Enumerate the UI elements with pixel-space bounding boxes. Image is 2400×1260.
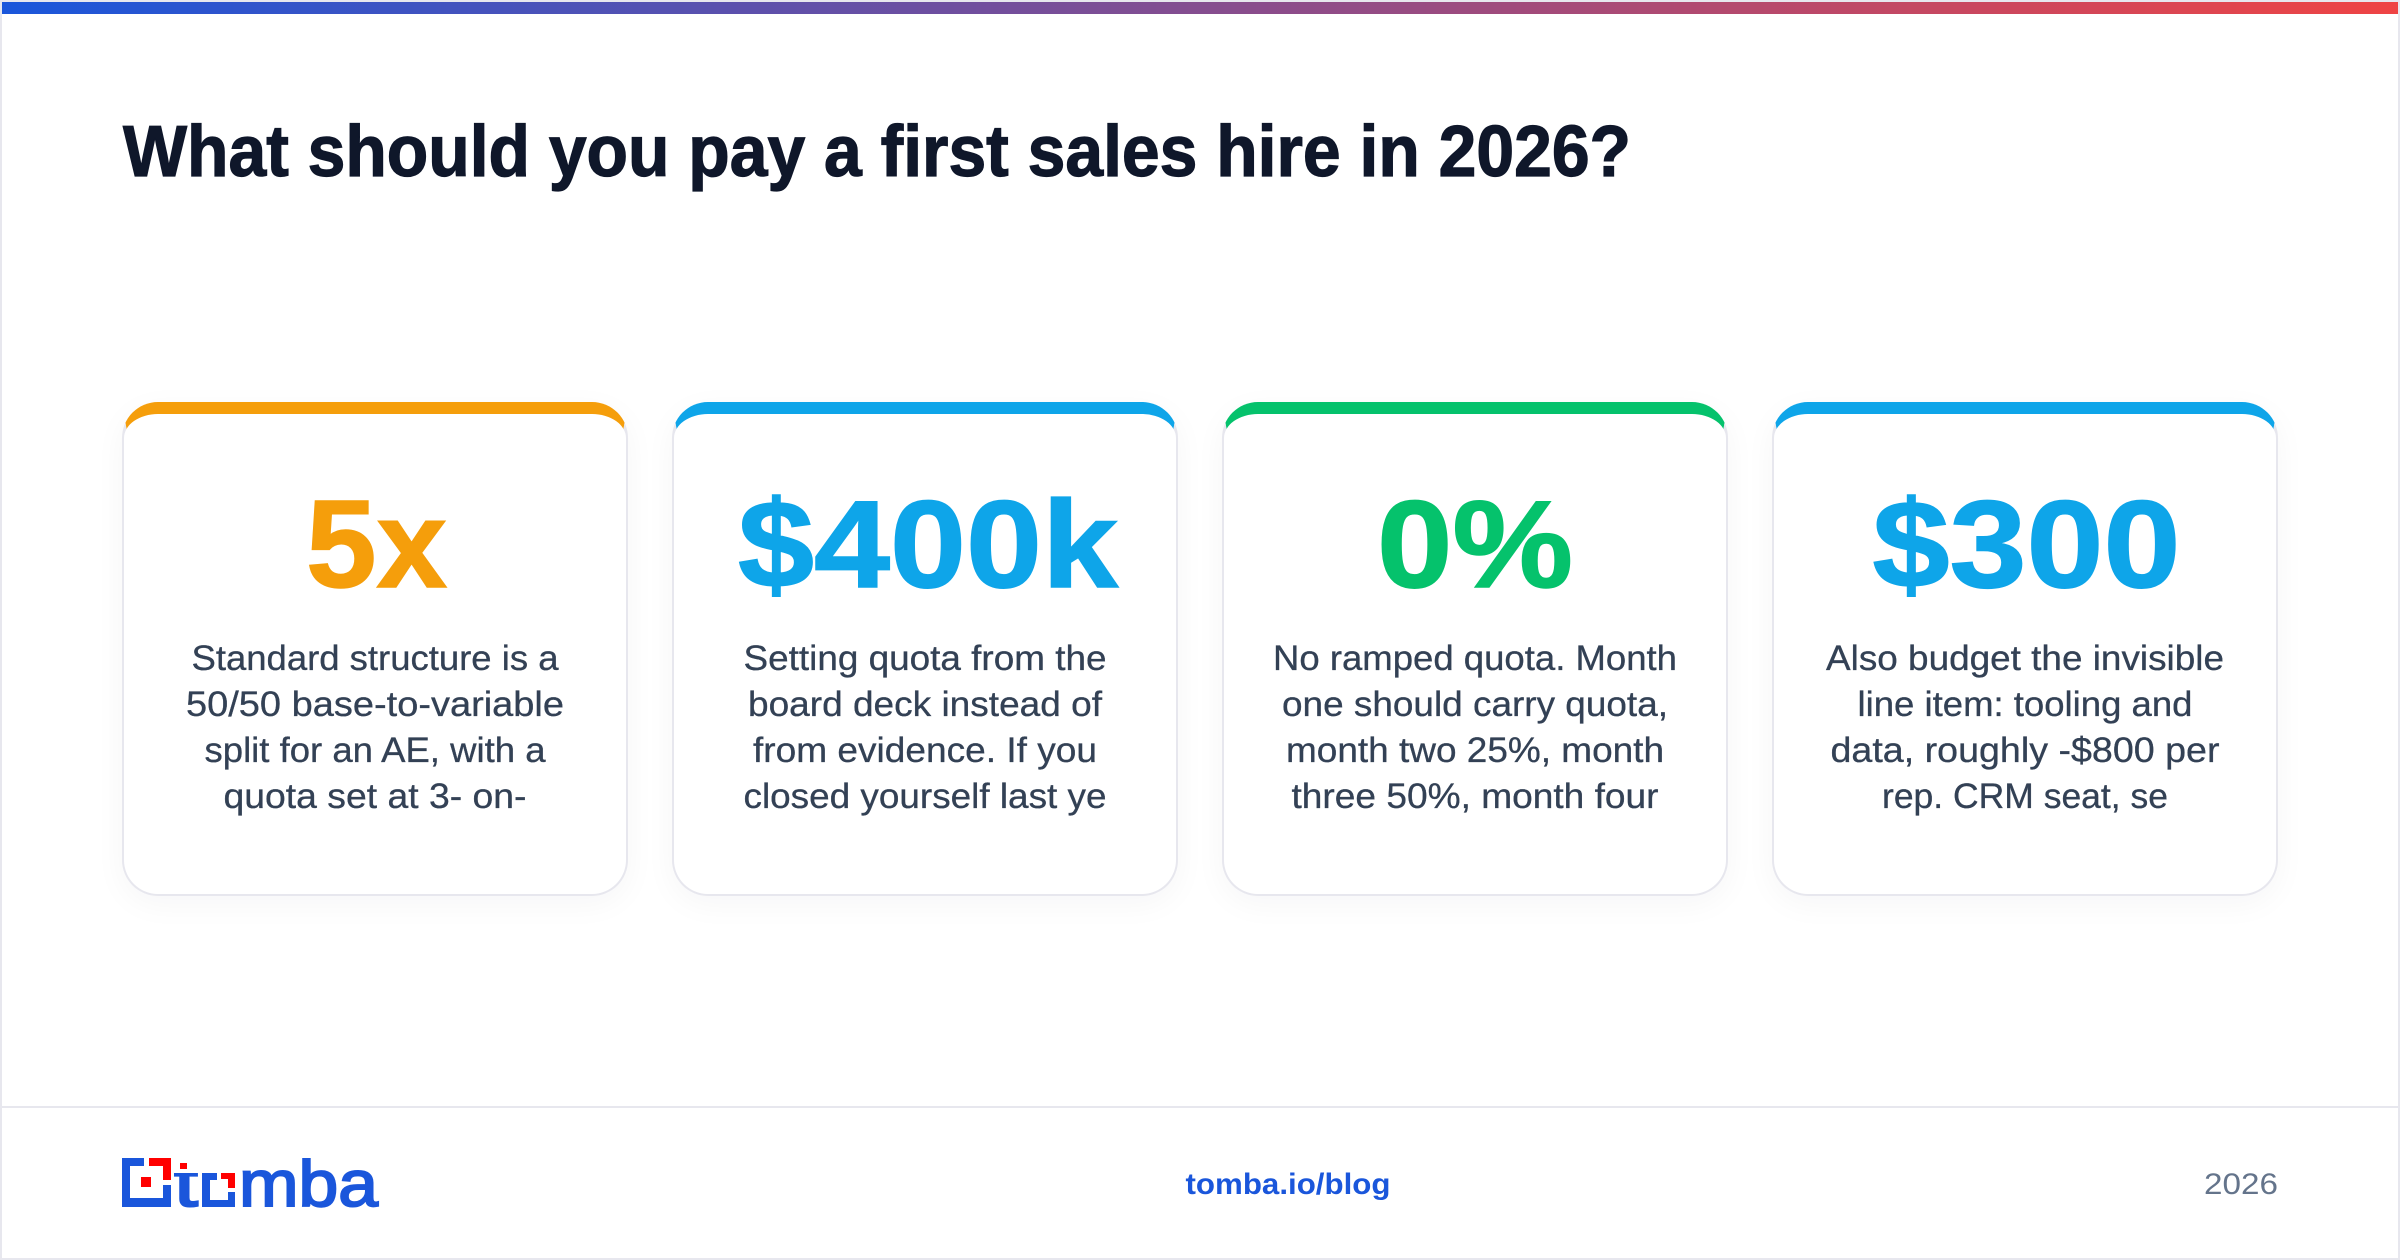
footer [2,1106,2398,1208]
description: setting quota: board deck instead of [748,685,1102,724]
logo wordmark: mba [239,1147,379,1220]
description: base-to-variable split: 50/50 base-to-variable [186,685,564,724]
stat number: 5x: 5x [306,476,447,614]
logo wordmark [174,1158,380,1208]
title: What should you pay a first sales hire in 2026? [123,112,1631,192]
description: ramped quota: three 50%, month four [1292,777,1659,816]
stat number: $300: $300 [1872,476,2180,614]
top gradient bar [2,2,2398,14]
description: setting quota: closed yourself last ye [744,777,1106,816]
panel: 0% stat card [1222,402,1728,896]
logo icon [122,1158,171,1207]
description: invisible line item: Also budget the invisible [1826,639,2224,678]
description: invisible line item [1826,639,2224,816]
logo wordmark: t [174,1147,198,1220]
description: base-to-variable split: split for an AE, with a [204,731,546,770]
footer link: tomba.io/blog [1186,1168,1390,1201]
logo: tomba [122,1158,380,1208]
stat number: 0%: 0% [1377,476,1573,614]
stat number: $400k: $400k [738,476,1119,614]
panel: $300 stat card [1772,402,2278,896]
description: base-to-variable split [186,639,564,816]
description: invisible line item: line item: tooling and [1858,685,2192,724]
panel: 5x stat card [122,402,628,896]
description: invisible line item: rep. CRM seat, se [1882,777,2168,816]
description: setting quota: Setting quota from the [744,639,1106,678]
description: ramped quota: one should carry quota, [1282,685,1668,724]
description: setting quota: from evidence. If you [753,731,1097,770]
footer year: 2026 [2204,1168,2278,1201]
logo letter marks [180,1163,235,1207]
description: ramped quota: No ramped quota. Month [1273,639,1677,678]
panel: $400k stat card [672,402,1178,896]
description: ramped quota [1273,639,1677,816]
description: base-to-variable split: quota set at 3- on- [224,777,526,816]
description: base-to-variable split: Standard structure is a [192,639,559,678]
description: ramped quota: month two 25%, month [1286,731,1664,770]
description: setting quota [744,639,1106,816]
description: invisible line item: data, roughly -$800 per [1830,731,2220,770]
